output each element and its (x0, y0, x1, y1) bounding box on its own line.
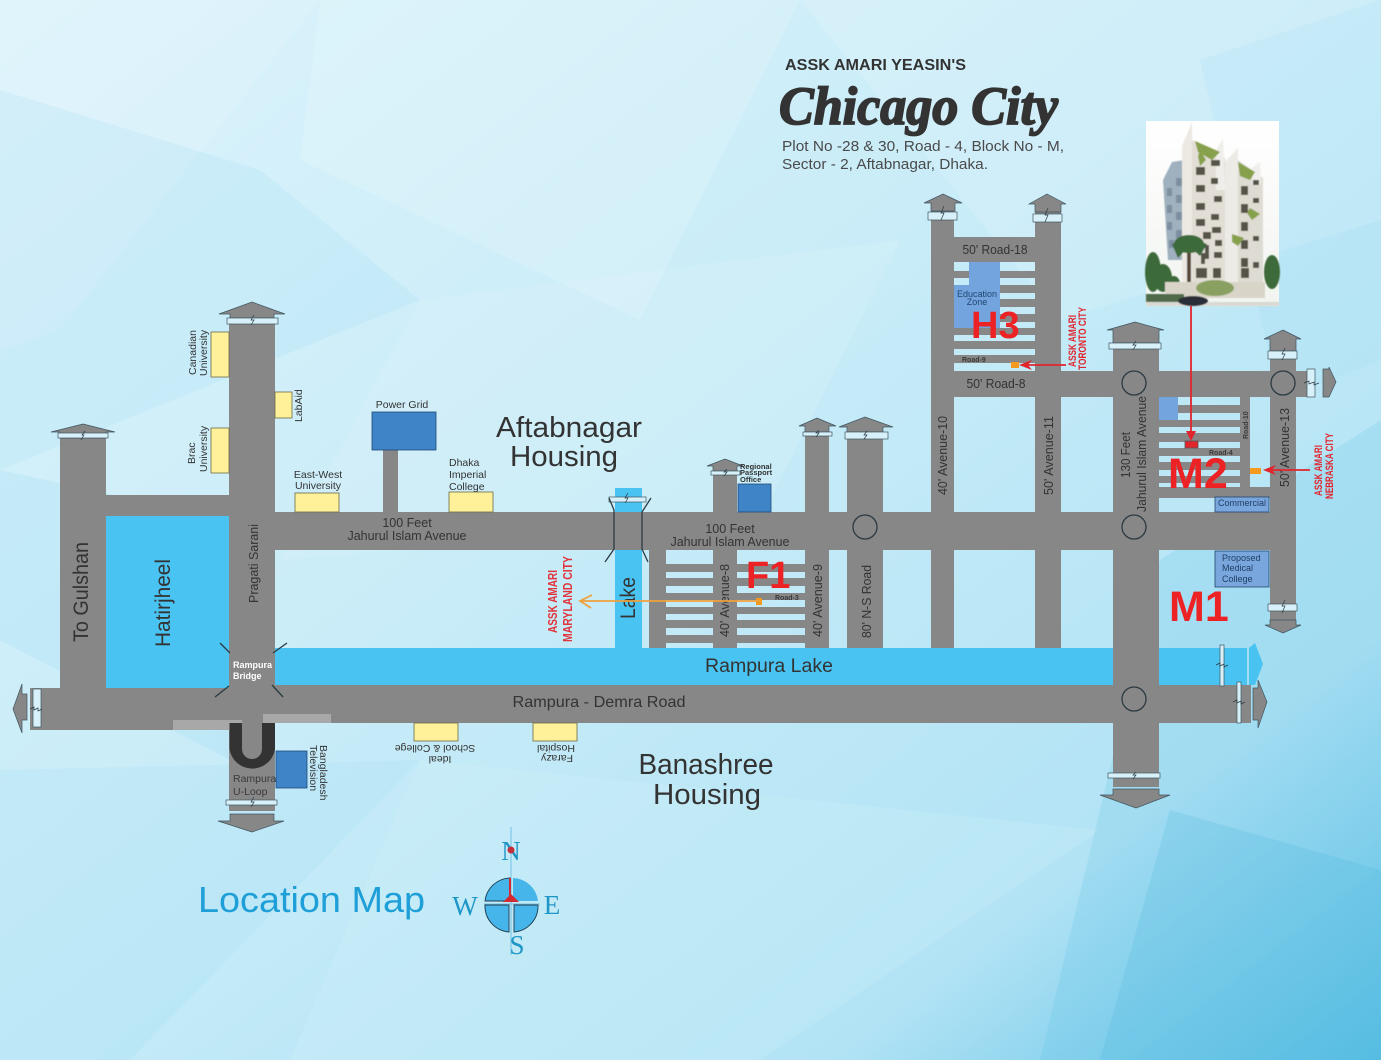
road network (30, 203, 1307, 811)
road label: Road 3: Road-3 (775, 595, 799, 602)
road label: 50 Avenue 11: 50' Avenue-11 (1041, 416, 1056, 495)
water: Rampura Lake (275, 643, 1263, 685)
road label: 80 N-S Road: 80' N-S Road (859, 565, 874, 638)
landmark: Education Zone: Zone (967, 297, 987, 307)
pointer: Toronto City (1011, 307, 1089, 370)
block: F1: F1 (746, 555, 790, 597)
label: Canadian University (187, 329, 210, 376)
road: N-S road (847, 427, 883, 648)
landmarks: blue buildings (276, 412, 771, 788)
road label: 100 feet west: Jahurul Islam Avenue (348, 529, 467, 543)
road: connector to Pragati Sarani (106, 495, 229, 516)
road: Power Grid spur (383, 450, 398, 512)
block stripes: F1 lanes (666, 564, 805, 643)
road label: Road 9: Road-9 (962, 357, 986, 364)
address (782, 138, 1064, 173)
label: Brac University: Brac (186, 442, 198, 464)
label: Dhaka Imperial College (449, 457, 486, 493)
label: Dhaka Imperial College: Imperial (449, 469, 486, 481)
water: Lake channel (615, 488, 642, 648)
landmark: Proposed Medical College: Medical (1222, 563, 1253, 573)
label: Rampura U-Loop (233, 773, 276, 798)
road: M block south lane (1159, 487, 1270, 498)
building photo illustration (1145, 121, 1280, 306)
block: M1: M1 (1169, 583, 1229, 631)
Rampura U-loop (230, 723, 275, 769)
cap: Demra east (1237, 680, 1267, 728)
address: Sector - 2, Aftabnagar, Dhaka. (782, 156, 988, 173)
bridge markers and roundabouts (215, 371, 1295, 711)
label: Bangladesh Television: Bangladesh (317, 745, 329, 801)
water label: Rampura Lake: Rampura Lake (705, 656, 833, 677)
road label: Road 10: Road-10 (1243, 411, 1250, 439)
area: Banashree Housing (638, 749, 774, 811)
label: Dhaka Imperial College: Dhaka (449, 457, 480, 469)
label: Canadian University: Canadian (187, 330, 199, 375)
road: Avenue 11 (1035, 203, 1061, 648)
label: Bangladesh Television (307, 745, 329, 801)
road label: Road 8: 50' Road-8 (966, 377, 1026, 391)
road: Avenue 9 (805, 426, 829, 648)
area: Aftabnagar Housing: Housing (510, 441, 618, 473)
road label: 100 feet east: Jahurul Islam Avenue (670, 535, 790, 549)
cap: Gulshan road (51, 424, 115, 438)
road: Avenue 10 (931, 203, 954, 648)
landmark: Commercial: Commercial (1218, 498, 1266, 508)
header: project title block (779, 57, 1064, 173)
road label: Rampura Demra Road: Rampura - Demra Road (512, 694, 686, 711)
label: Regional Passport Office: Passport (740, 468, 773, 477)
road: 130 feet avenue (1113, 335, 1159, 787)
road label: 40 Avenue 9: 40' Avenue-9 (810, 564, 825, 637)
road: Road 18 (954, 237, 1035, 262)
cap: 130 feet avenue (1107, 322, 1164, 349)
cap: Lake bar (609, 497, 646, 502)
road label: 130 feet avenue: 130 Feet (1118, 432, 1133, 478)
Rampura overpass slip roads (173, 714, 331, 730)
label: Power Grid: Power Grid (376, 399, 428, 411)
label: East-West University: East-West (294, 469, 342, 481)
label: Rampura Bridge: Bridge (233, 671, 262, 681)
compass (452, 827, 560, 960)
label: East-West University: University (295, 480, 342, 492)
road label: 100 feet east: 100 Feet (705, 522, 755, 536)
landmark: Power Grid (372, 412, 436, 450)
area: Banashree Housing: Banashree (638, 749, 774, 781)
cap: Avenue 8 (707, 459, 743, 475)
compass: E (544, 890, 560, 920)
landmark: Canadian University (211, 332, 229, 377)
cap: N-S road (839, 417, 893, 439)
landmark: Proposed Medical College: College (1222, 574, 1253, 584)
landmark: East-West University (295, 493, 339, 512)
label: Ideal School and College (395, 742, 475, 765)
area: Aftabnagar Housing: Aftabnagar (496, 412, 642, 444)
road label: To Gulshan: To Gulshan (70, 542, 93, 642)
block labels (746, 305, 1229, 631)
road: to Gulshan (60, 438, 106, 688)
pointer: Nebraska City (1250, 433, 1336, 499)
cap: Avenue 13 south (1265, 604, 1301, 633)
road label: 100 feet west: 100 Feet (382, 516, 432, 530)
road label: Pragati Sarani: Pragati Sarani (246, 524, 261, 603)
cap: Avenue 9 (799, 418, 836, 436)
landmark: LabAid (275, 392, 292, 418)
road: F1 west avenue (649, 550, 666, 648)
label: Regional Passport Office (740, 462, 773, 484)
label: Rampura Bridge (233, 660, 273, 681)
landmarks: yellow buildings (211, 332, 577, 741)
road label: 50 Avenue 13: 50' Avenue-13 (1277, 408, 1292, 487)
road label: 130 feet avenue (1118, 396, 1149, 512)
block: M2: M2 (1168, 450, 1228, 498)
label: Canadian University: University (198, 329, 210, 376)
landmark: Education Zone: Education (957, 289, 997, 299)
pointer: Nebraska City: ASSK AMARI (1313, 445, 1325, 496)
cap: Road 8 east (1307, 367, 1336, 397)
label: Ideal School and College: School & College (395, 742, 475, 754)
landmark: Dhaka Imperial College (449, 492, 493, 512)
road end caps and break markers (13, 194, 1336, 832)
label: Farazy Hospital: Hospital (537, 742, 575, 754)
pointer: Maryland City: MARYLAND CITY (561, 555, 575, 642)
block: H3: H3 (971, 305, 1020, 347)
landmark: Education Zone (954, 262, 1000, 328)
label: Brac University (186, 425, 210, 472)
water: Hatirjheel (106, 516, 229, 688)
pointer: Toronto City: TORONTO CITY (1077, 307, 1089, 370)
area: Aftabnagar Housing (496, 412, 642, 473)
road: Road 8 (954, 371, 1307, 397)
road label: 100 feet west (348, 516, 467, 543)
landmark: Ideal School and College (414, 723, 458, 741)
developer name: ASSK AMARI YEASIN'S (785, 57, 966, 74)
landmark: M block small facility (1159, 397, 1178, 420)
area: Banashree Housing: Housing (653, 779, 761, 811)
road: Pragati Sarani (229, 324, 275, 811)
cap: Avenue 10 (924, 194, 962, 220)
compass: W (452, 891, 478, 921)
road: Rampura-Demra east section (242, 685, 1251, 723)
heading: Location Map: Location Map (198, 879, 425, 920)
water label: Lake: Lake (617, 577, 640, 619)
block stripes: M2 lanes (1159, 405, 1240, 483)
road: Rampura-Demra west section (30, 688, 242, 730)
road names (70, 243, 1292, 711)
cap: Rampura south (218, 800, 284, 832)
label: Ideal School and College: Ideal (429, 753, 451, 765)
cap: Avenue 13 (1264, 330, 1301, 359)
pointer: Maryland City (546, 555, 762, 642)
project logotype: Chicago City (779, 76, 1059, 136)
label: Farazy Hospital: Farazy (540, 752, 573, 764)
landmark: Commercial (1215, 497, 1269, 512)
road: Avenue 8 (713, 466, 737, 648)
label: Brac University: University (198, 425, 210, 472)
compass: S (509, 930, 525, 960)
road: Road 10 (1240, 397, 1250, 498)
water label: Hatirjheel: Hatirjheel (152, 559, 175, 647)
landmark labels (186, 329, 773, 801)
label: Regional Passport Office: Regional (740, 462, 772, 471)
pointer: Toronto City: ASSK AMARI (1067, 315, 1079, 367)
landmark: Bangladesh Television (276, 751, 307, 788)
cap: Pragati Sarani (219, 302, 285, 324)
landmark: Proposed Medical College: Proposed (1222, 553, 1261, 563)
landmark: Proposed Medical College (1215, 551, 1269, 587)
road label: Road 18: 50' Road-18 (962, 243, 1028, 257)
pointer: Maryland City: ASSK AMARI (546, 570, 560, 633)
road label: 100 feet east (670, 522, 790, 549)
label: Dhaka Imperial College: College (449, 481, 485, 493)
label: Bangladesh Television: Television (307, 745, 319, 791)
label: Rampura U-Loop: U-Loop (233, 786, 268, 798)
cap: Demra west (13, 684, 41, 733)
label: LabAid: LabAid (293, 389, 305, 422)
label: East-West University (294, 469, 342, 492)
cap: 130 feet south (1100, 773, 1170, 808)
address: Plot No -28 & 30, Road - 4, Block No - M, (782, 138, 1064, 155)
landmark: Brac University (211, 428, 229, 473)
road label: Road 4: Road-4 (1209, 450, 1233, 457)
label: Rampura U-Loop: Rampura (233, 773, 276, 785)
pointer: Nebraska City: NEBRASKA CITY (1324, 433, 1336, 499)
landmark: Regional Passport Office (738, 484, 771, 512)
road: Avenue 13 (1270, 339, 1296, 620)
compass: N (501, 836, 521, 866)
label: Regional Passport Office: Office (740, 475, 761, 484)
pointer: project site marker (1185, 306, 1198, 448)
road label: 40 Avenue 10: 40' Avenue-10 (935, 416, 950, 495)
block stripes: H3 lanes (954, 271, 1035, 363)
area labels (496, 412, 774, 811)
cap: Avenue 11 (1029, 194, 1066, 222)
cap: lake east bar (1220, 645, 1224, 686)
landmark: Farazy Hospital (533, 723, 577, 741)
road: 100 feet Jahurul Islam Avenue (275, 512, 1296, 550)
label: Rampura Bridge: Rampura (233, 660, 273, 670)
label: Farazy Hospital (537, 742, 575, 764)
road label: 40 Avenue 8: 40' Avenue-8 (717, 564, 732, 637)
road label: 130 feet avenue: Jahurul Islam Avenue (1134, 396, 1149, 512)
